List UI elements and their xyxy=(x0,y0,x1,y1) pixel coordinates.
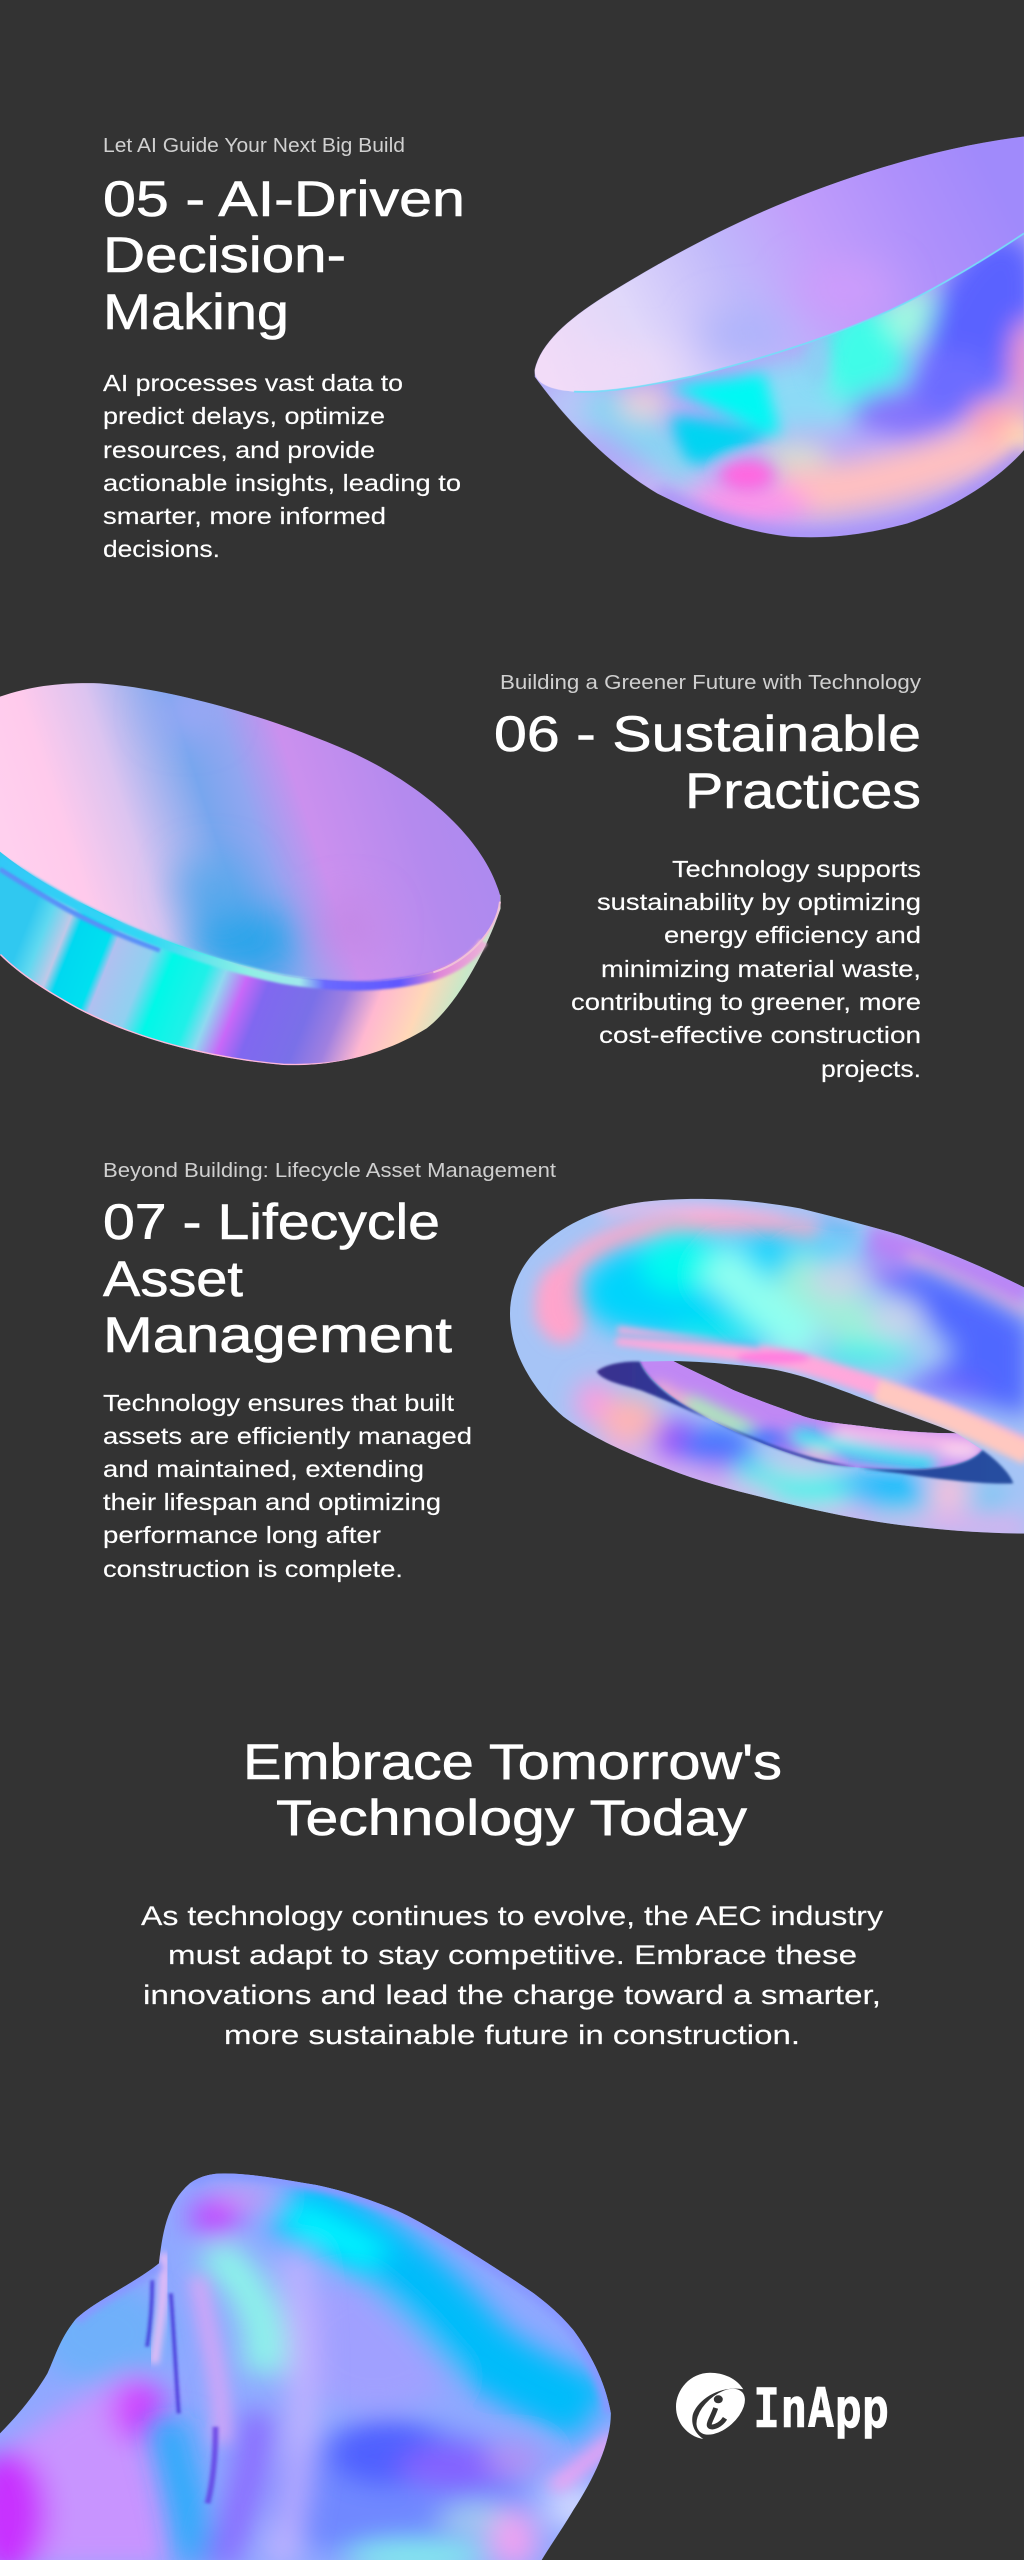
heading 05 xyxy=(103,171,465,340)
closing body text: must adapt to stay competitive. Embrace these xyxy=(168,1940,857,1970)
body text 05: predict delays, optimize xyxy=(103,403,385,429)
body text 05: smarter, more informed xyxy=(103,503,386,529)
body text 06: sustainability by optimizing xyxy=(597,889,921,915)
closing heading: Embrace Tomorrow's xyxy=(243,1734,782,1790)
heading 07: Asset xyxy=(103,1251,243,1307)
logo mark xyxy=(676,2373,753,2443)
heading 07: 07 - Lifecycle xyxy=(103,1194,440,1250)
body text 05: decisions. xyxy=(103,536,220,562)
closing body text xyxy=(141,1901,884,2050)
torus inner wall xyxy=(633,1357,987,1473)
body text 06: Technology supports xyxy=(672,856,921,882)
image: iridescent torus xyxy=(500,1190,1024,1540)
panel: closing call to action xyxy=(141,1734,884,2050)
logo: InApp xyxy=(676,2373,889,2443)
image: iridescent disc xyxy=(0,675,503,1075)
body text 06: minimizing material waste, xyxy=(601,956,921,982)
bowl rim highlight xyxy=(574,233,1024,392)
heading 05: 05 - AI-Driven xyxy=(103,171,465,227)
closing body text: innovations and lead the charge toward a smarter, xyxy=(143,1980,881,2010)
body text 05: actionable insights, leading to xyxy=(103,470,461,496)
blob outer edge tint xyxy=(75,2173,611,2413)
body text 05 xyxy=(103,370,461,562)
heading 06 xyxy=(494,706,921,819)
body text 05: resources, and provide xyxy=(103,437,375,463)
heading 07: Management xyxy=(103,1307,452,1363)
torus inner shadow crescent xyxy=(597,1362,1013,1484)
heading 07 xyxy=(103,1194,452,1363)
body text 07: construction is complete. xyxy=(103,1556,403,1582)
subtitle 06: Building a Greener Future with Technology xyxy=(500,672,921,694)
heading 05: Making xyxy=(103,284,289,340)
subtitle 07: Beyond Building: Lifecycle Asset Management xyxy=(103,1160,556,1182)
subtitle 05: Let AI Guide Your Next Big Build xyxy=(103,135,405,157)
body text 06: cost-effective construction xyxy=(599,1022,921,1048)
heading 06: Practices xyxy=(685,763,921,819)
body text 05: AI processes vast data to xyxy=(103,370,403,396)
body text 06 xyxy=(571,856,921,1082)
body text 07 xyxy=(103,1390,472,1582)
body text 07: Technology ensures that built xyxy=(103,1390,455,1416)
body text 06: contributing to greener, more xyxy=(571,989,921,1015)
closing body text: more sustainable future in construction. xyxy=(224,2020,800,2050)
body text 07: their lifespan and optimizing xyxy=(103,1489,441,1515)
panel: section 06 sustainable practices xyxy=(0,672,921,1082)
disc rim highlight xyxy=(0,860,500,986)
body text 06: projects. xyxy=(821,1056,921,1082)
body text 06: energy efficiency and xyxy=(664,922,921,948)
body text 07: and maintained, extending xyxy=(103,1456,424,1482)
body text 07: performance long after xyxy=(103,1522,381,1548)
closing heading xyxy=(243,1734,782,1846)
logo wordmark: InApp xyxy=(753,2377,889,2440)
panel: section 07 lifecycle asset management xyxy=(103,1160,1024,1582)
heading 05: Decision- xyxy=(103,227,346,283)
image: iridescent bowl xyxy=(524,130,1024,543)
closing body text: As technology continues to evolve, the AEC industry xyxy=(141,1901,884,1931)
panel: section 05 AI-driven decision-making xyxy=(103,130,1024,562)
heading 06: 06 - Sustainable xyxy=(494,706,921,762)
image: iridescent blob xyxy=(0,2160,617,2560)
closing heading: Technology Today xyxy=(276,1790,747,1846)
body text 07: assets are efficiently managed xyxy=(103,1423,472,1449)
